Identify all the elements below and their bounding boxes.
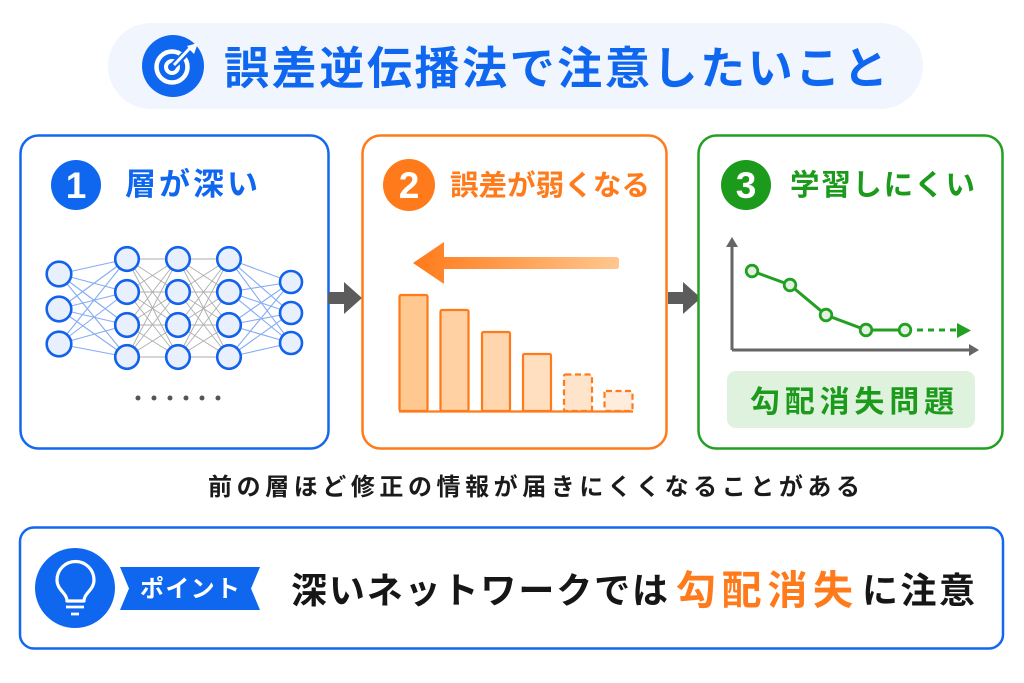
badge 2 <box>383 159 435 211</box>
panel: error weakens <box>362 136 666 448</box>
panel: layers are deep <box>20 136 328 448</box>
key message: に注意 <box>862 570 975 611</box>
title banner <box>108 23 923 109</box>
label: vanishing gradient problem: 勾配消失問題 <box>750 386 954 419</box>
badge 1 <box>51 160 101 210</box>
ribbon: ポイント: ポイント <box>140 576 240 603</box>
badge 3 <box>721 160 771 210</box>
arrow: error flows backward <box>413 242 619 284</box>
badge 2: 2 <box>399 165 419 206</box>
heading: 誤差が弱くなる: 誤差が弱くなる <box>450 169 650 202</box>
badge 1: 1 <box>66 165 86 206</box>
panel: hard to learn <box>698 136 1002 448</box>
heading: 層が深い: 層が深い <box>125 167 258 202</box>
bar chart: shrinking error <box>399 295 633 412</box>
ribbon: ポイント <box>120 567 260 610</box>
arrow: panel 2 to 3 <box>668 282 701 314</box>
label: vanishing gradient problem <box>727 371 975 428</box>
icon: light bulb <box>35 548 115 628</box>
badge 3: 3 <box>736 165 756 206</box>
icon: target <box>142 35 204 97</box>
arrow: panel 1 to 2 <box>328 282 362 314</box>
title text: 誤差逆伝播法で注意したいこと <box>224 43 888 94</box>
neural network diagram <box>47 247 302 400</box>
key message: 勾配消失 <box>676 569 853 613</box>
line chart: flattening gradient <box>726 237 979 356</box>
caption: 前の層ほど修正の情報が届きにくくなることがある <box>208 473 860 501</box>
panel: point callout <box>20 528 1003 648</box>
heading: 学習しにくい: 学習しにくい <box>790 169 975 202</box>
key message: 深いネットワークでは <box>291 570 668 611</box>
